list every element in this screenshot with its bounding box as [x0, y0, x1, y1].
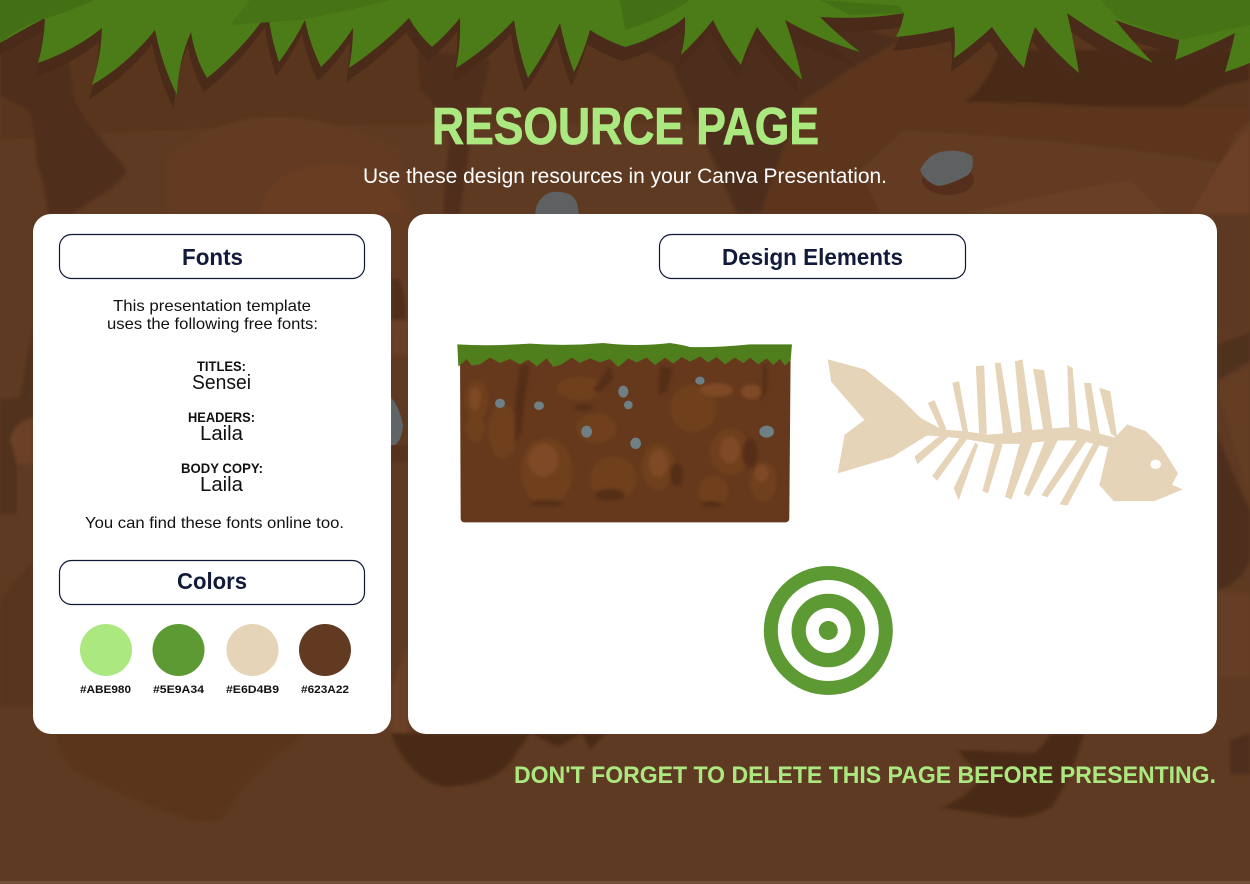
- text block: headers font: HEADERS:: [188, 409, 255, 425]
- subtitle: Use these design resources in your Canva Presentation.: [363, 165, 887, 188]
- stone: upper right: [920, 151, 974, 195]
- heading: fonts: Fonts: [182, 244, 243, 270]
- text block: fonts intro: This presentation template: [113, 298, 311, 315]
- text block: body copy font: [181, 460, 263, 496]
- swatch: sand: #E6D4B9: [226, 684, 279, 696]
- heading: design elements: [660, 234, 966, 278]
- footer note: DON'T FORGET TO DELETE THIS PAGE BEFORE PRESENTING.: [514, 762, 1216, 789]
- heading: design elements: Design Elements: [722, 244, 903, 270]
- swatch: sand: [226, 624, 279, 696]
- text block: body copy font: Laila: [200, 474, 244, 496]
- swatch: light green: #ABE980: [80, 684, 131, 696]
- grass fringe: [0, 0, 1250, 109]
- text block: headers font: Laila: [200, 423, 244, 445]
- text block: fonts note: You can find these fonts online too.: [85, 515, 344, 532]
- stone: behind panels: [385, 393, 403, 445]
- text block: body copy font: BODY COPY:: [181, 460, 263, 476]
- text block: titles font: [192, 358, 251, 394]
- illustration: target rings: [764, 566, 893, 695]
- swatch: brown: [299, 624, 351, 696]
- text block: fonts intro: [107, 298, 318, 333]
- heading: colors: Colors: [177, 568, 247, 594]
- swatch: green: #5E9A34: [153, 684, 205, 696]
- heading: colors: [60, 560, 364, 604]
- panel: design elements: [408, 214, 1217, 734]
- text block: fonts intro: uses the following free fonts:: [107, 316, 318, 333]
- stone: top centre: [535, 192, 579, 214]
- illustration: soil block: [457, 343, 792, 522]
- swatch: green: [152, 624, 205, 696]
- text block: titles font: TITLES:: [197, 358, 246, 374]
- swatch: light green: [80, 624, 132, 696]
- swatch: brown: #623A22: [301, 684, 349, 696]
- panel: fonts and colors: [33, 214, 391, 734]
- text block: titles font: Sensei: [192, 372, 251, 394]
- title: RESOURCE PAGE: [432, 98, 819, 156]
- heading: fonts: [60, 234, 364, 278]
- text block: headers font: [188, 409, 255, 445]
- illustration: fish skeleton: [828, 360, 1181, 505]
